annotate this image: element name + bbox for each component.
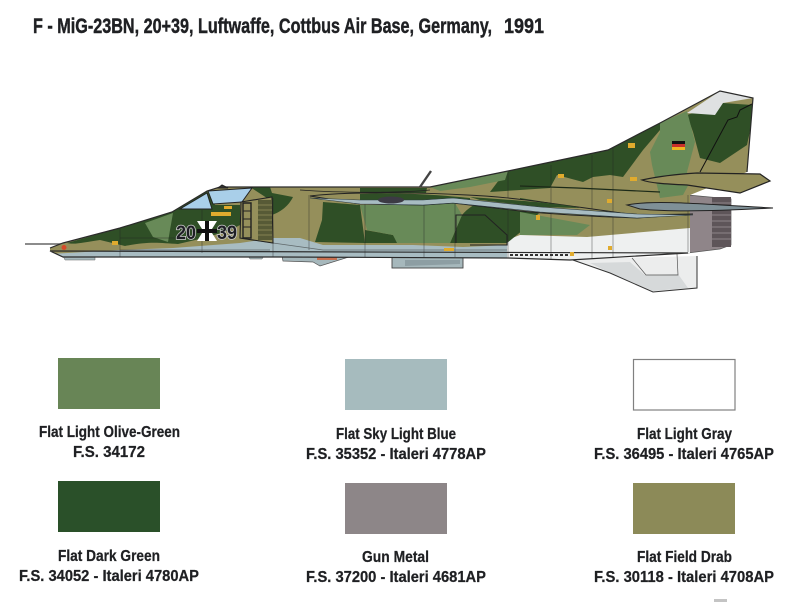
fuselage outline [50,91,753,260]
far tailplane [627,202,773,211]
swing wing [310,193,693,218]
label: gun metal: Gun Metal [362,549,429,566]
dorsal antenna [420,171,431,187]
label: flat dark green: Flat Dark Green [58,548,160,565]
canopy [180,185,252,209]
label: flat field drab: F.S. 30118 - Italeri 4708AP [594,569,774,586]
dorsal strip line [300,190,430,192]
label: flat light gray: F.S. 36495 - Italeri 4765AP [594,446,774,463]
near tailplane [642,173,770,193]
title: F - MiG-23BN, 20+39, Luftwaffe, Cottbus Air Base, Germany, [33,15,492,38]
swatch: flat sky light blue [345,359,447,410]
label: flat light gray: Flat Light Gray [637,426,732,443]
yellow stencils [62,143,637,256]
ventral fin [570,254,697,292]
swatch: flat light gray [634,360,735,410]
swatch: gun metal [345,483,447,534]
underwing stores and pylons [63,256,463,268]
flag [672,141,685,150]
lower white section small marks [510,254,570,256]
air intake [240,197,273,243]
label: gun metal: F.S. 37200 - Italeri 4681AP [306,569,486,586]
underside white [507,228,690,262]
fin tip gray [687,91,753,115]
light olive-green patches [145,111,695,243]
label: flat light olive-green: Flat Light Olive-Green [39,424,180,441]
iron cross [197,221,217,241]
label: flat light olive-green: F.S. 34172 [73,444,145,461]
fuselage and fin camouflage [50,92,752,260]
label: flat sky light blue: F.S. 35352 - Italeri 4778AP [306,446,486,463]
panel lines [120,148,688,262]
title: 1991 [504,15,544,38]
national insignia and number [176,221,237,244]
swatch: flat dark green [58,481,160,532]
pitot probe [25,243,64,245]
aircraft side view [20,80,773,292]
swatch: flat field drab [633,483,735,534]
dark green patches [67,103,753,246]
label: flat sky light blue: Flat Sky Light Blue [336,426,456,443]
swatch: flat light olive-green [58,358,160,409]
exhaust nozzle [688,195,731,253]
label: flat field drab: Flat Field Drab [637,549,732,566]
label: flat dark green: F.S. 34052 - Italeri 4780AP [19,568,199,585]
underside blue [57,238,507,258]
page mark [714,599,727,602]
national insignia and number: 39 [217,223,237,244]
national insignia and number: 20 [176,223,196,244]
